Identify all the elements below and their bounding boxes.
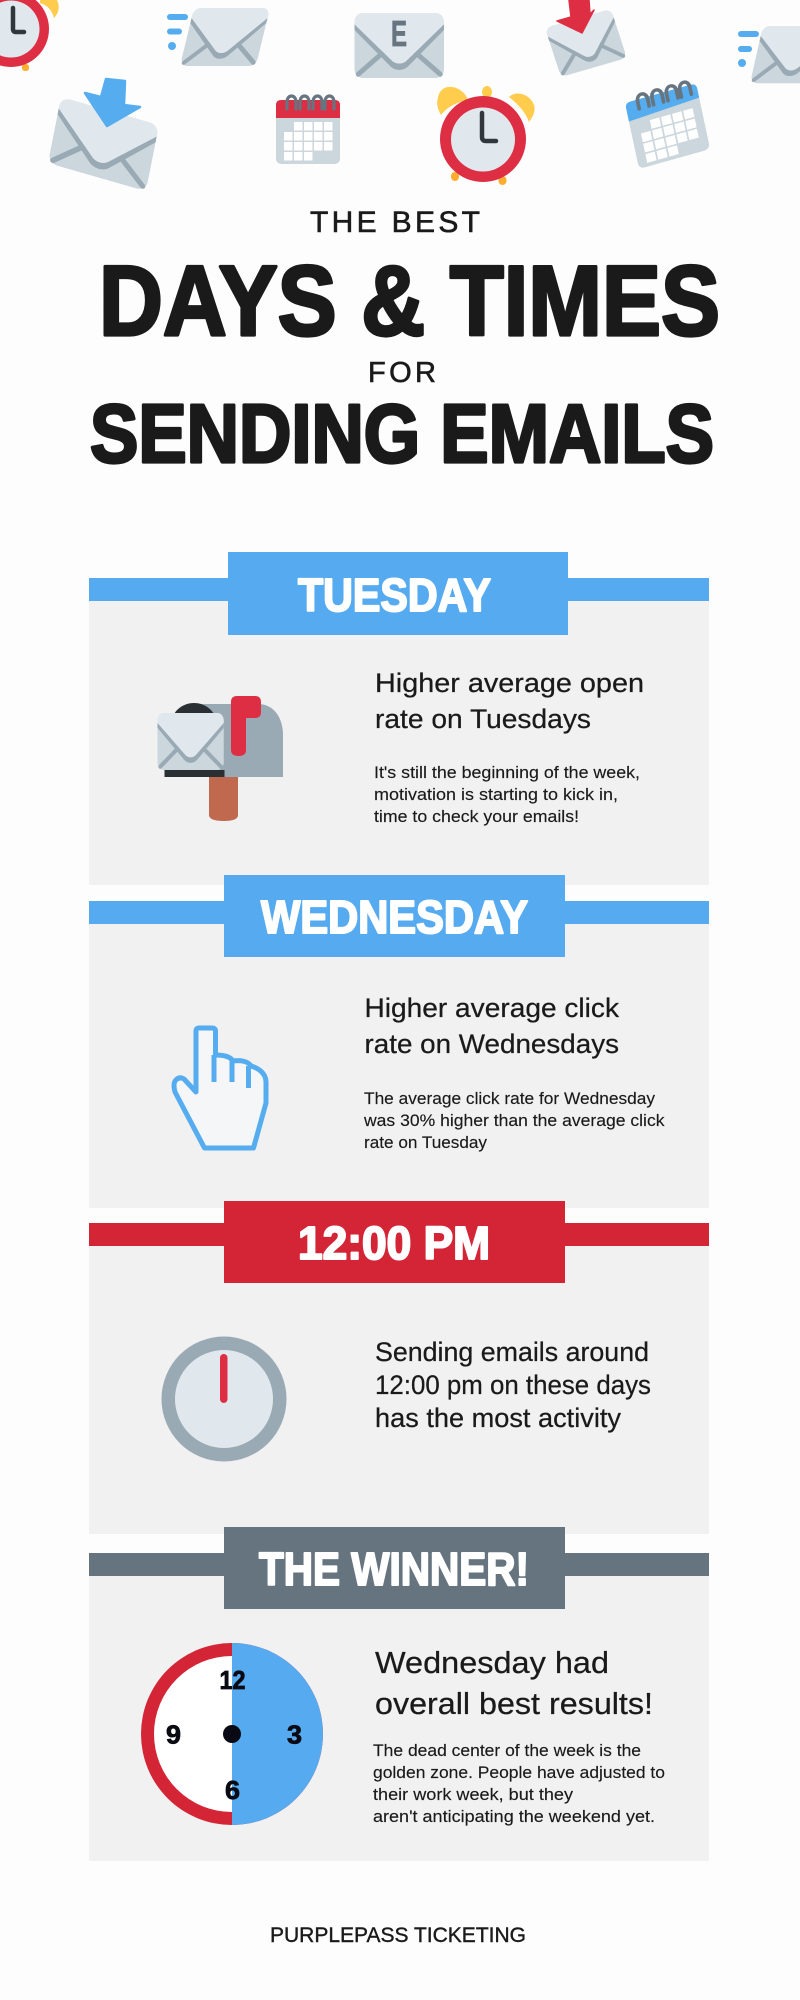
icon: half-filled clock: 9: [166, 1720, 181, 1750]
title: [90, 206, 720, 480]
text block: 12:00 pm: Sending emails around: [375, 1337, 649, 1367]
text block: 12:00 pm: 12:00 pm on these days: [375, 1370, 651, 1400]
icon: half-filled clock: 6: [225, 1775, 240, 1805]
icon: alarm clock top left: [0, 0, 59, 71]
text block: wednesday: rate on Tuesday: [364, 1133, 487, 1152]
title: FOR: [368, 357, 436, 389]
text block: wednesday: rate on Wednesdays: [364, 1029, 619, 1059]
title: SENDING EMAILS: [90, 387, 714, 480]
text block: wednesday: was 30% higher than the average click: [363, 1111, 665, 1130]
icon: speeding envelope right: [738, 26, 800, 83]
text block: tuesday: [374, 668, 644, 826]
title: DAYS & TIMES: [99, 245, 720, 356]
text block: the winner: golden zone. People have adjusted to: [373, 1763, 665, 1782]
icon: clock at noon: [162, 1336, 286, 1462]
panel: the winner: [89, 1527, 709, 1861]
text block: the winner: [373, 1645, 665, 1826]
text block: tuesday: Higher average open: [375, 668, 644, 698]
icon: half-filled clock: 12: [220, 1665, 246, 1695]
text block: the winner: their work week, but they: [373, 1785, 574, 1804]
icon: envelope with blue arrow: [48, 79, 159, 191]
text block: tuesday: rate on Tuesdays: [375, 704, 591, 734]
text block: tuesday: motivation is starting to kick in,: [374, 785, 618, 804]
icon: pointing hand: [174, 1028, 266, 1148]
text block: wednesday: [363, 993, 665, 1152]
text block: 12:00 pm: [375, 1337, 651, 1433]
icon: envelope with red arrow: [545, 0, 627, 77]
icon: envelope with E: [354, 13, 444, 78]
panel: 12:00 pm: [89, 1201, 709, 1534]
icon: mailbox: [158, 696, 283, 821]
footer: PURPLEPASS TICKETING: [270, 1924, 526, 1947]
icon: half-filled clock: 3: [287, 1720, 302, 1750]
text block: wednesday: The average click rate for Wednesday: [364, 1089, 656, 1108]
icon: speeding envelope: [167, 8, 270, 66]
text block: the winner: The dead center of the week is the: [373, 1741, 641, 1760]
panel: wednesday: [89, 875, 709, 1208]
text block: 12:00 pm: has the most activity: [375, 1403, 621, 1433]
icon: alarm clock large: [437, 86, 535, 185]
heading: 12:00 pm: 12:00 PM: [298, 1217, 490, 1269]
panel: tuesday: [89, 552, 709, 885]
icon: blue calendar: [624, 79, 710, 169]
heading: the winner: THE WINNER!: [259, 1543, 529, 1595]
text block: the winner: aren't anticipating the weekend yet.: [373, 1807, 655, 1826]
icon: half-filled clock: [141, 1643, 323, 1825]
heading: wednesday: WEDNESDAY: [261, 891, 528, 943]
text block: the winner: overall best results!: [375, 1686, 653, 1721]
text block: tuesday: time to check your emails!: [374, 807, 579, 826]
icon: envelope with E: E: [391, 13, 407, 54]
heading: tuesday: TUESDAY: [298, 569, 491, 621]
text block: the winner: Wednesday had: [375, 1645, 609, 1680]
text block: tuesday: It's still the beginning of the week,: [374, 763, 640, 782]
text block: wednesday: Higher average click: [364, 993, 620, 1023]
title: THE BEST: [310, 206, 480, 239]
icon: red calendar: [276, 96, 340, 164]
